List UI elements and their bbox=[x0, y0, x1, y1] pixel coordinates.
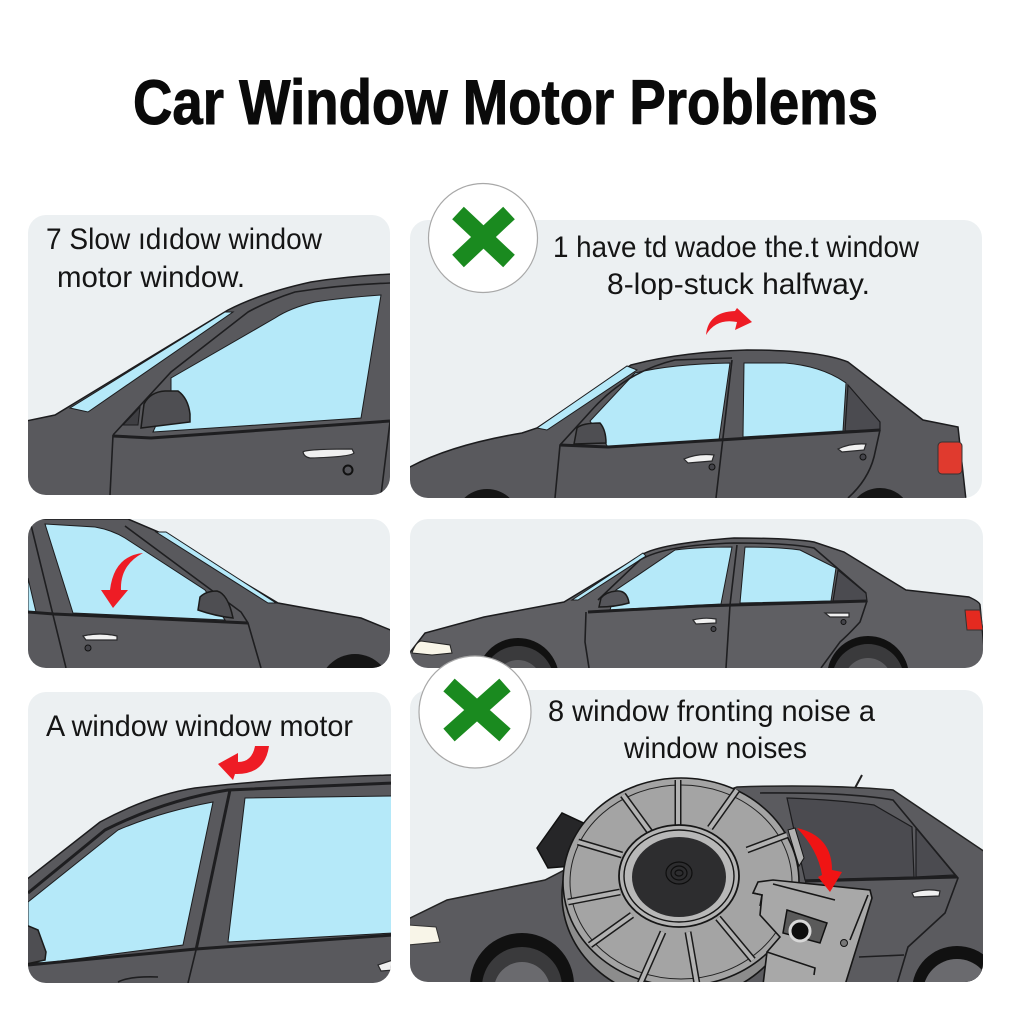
rear handle bbox=[825, 613, 849, 617]
wing mirror bbox=[599, 591, 629, 607]
caption line 2: 8-lop-stuck halfway. bbox=[607, 268, 870, 301]
belt line bbox=[560, 430, 880, 447]
door handle bbox=[303, 449, 354, 458]
red arrow bbox=[797, 828, 842, 892]
headlight bbox=[408, 925, 440, 945]
windshield bbox=[70, 312, 233, 412]
rim tab bbox=[788, 828, 804, 866]
spoke outlines bbox=[568, 780, 787, 984]
windshield bbox=[537, 366, 637, 430]
windshield strip bbox=[156, 532, 276, 603]
mirror triangle bbox=[123, 407, 140, 425]
quarter window bbox=[916, 828, 955, 877]
red arrow bbox=[218, 746, 269, 780]
windshield bbox=[572, 553, 646, 600]
rear window bbox=[787, 798, 914, 880]
lower door line bbox=[118, 950, 196, 983]
door handle bbox=[378, 960, 393, 971]
wing mirror bbox=[574, 423, 606, 444]
plate bracket bbox=[753, 884, 868, 975]
hub centre bbox=[666, 862, 692, 884]
panel: slow window motor bbox=[26, 215, 392, 497]
door window bbox=[45, 524, 225, 620]
lens bbox=[790, 921, 810, 941]
wing mirror bbox=[141, 391, 190, 428]
icon: green cross badge top bbox=[428, 184, 538, 292]
wing mirror bbox=[198, 591, 233, 618]
panel: window noises bbox=[408, 690, 1002, 1024]
belt line bbox=[113, 421, 390, 438]
front window bbox=[28, 802, 213, 963]
caption line 2: window noises bbox=[623, 732, 807, 765]
rear door handle bbox=[912, 890, 940, 897]
car body bbox=[26, 519, 393, 670]
wing mirror bbox=[26, 925, 46, 964]
plate screw bbox=[840, 940, 848, 946]
inner rim bbox=[570, 785, 792, 979]
rear wheel bbox=[912, 946, 1002, 1024]
wheel bbox=[319, 654, 391, 726]
car body bbox=[408, 538, 986, 670]
motor drum bbox=[562, 778, 804, 1000]
car body bbox=[26, 274, 392, 497]
panel: window stuck halfway bbox=[410, 220, 982, 498]
quarter window bbox=[833, 570, 867, 601]
panel: window motor bbox=[26, 692, 393, 985]
spoke faces bbox=[568, 780, 787, 984]
rear wheel bbox=[857, 488, 903, 498]
small rear window bbox=[28, 578, 36, 612]
car body bbox=[408, 786, 985, 984]
front wheel bbox=[464, 489, 510, 498]
door lines bbox=[31, 525, 261, 668]
red arrow bbox=[706, 308, 752, 335]
antenna bbox=[855, 775, 862, 788]
front wheel bbox=[477, 638, 559, 720]
front handle bbox=[693, 618, 716, 624]
caption: 1 have td wadoe the.t window bbox=[553, 231, 919, 264]
front handle bbox=[684, 454, 714, 463]
red arrow bbox=[101, 553, 143, 608]
lens housing bbox=[783, 910, 827, 943]
panel: sedan side view bbox=[408, 519, 986, 720]
door lock bbox=[344, 466, 352, 474]
door locks bbox=[711, 620, 846, 632]
door lines bbox=[585, 543, 867, 668]
gear plate bbox=[753, 880, 872, 985]
side window bbox=[153, 295, 381, 432]
tail light bbox=[965, 610, 983, 630]
caption: 8 window fronting noise a bbox=[548, 695, 875, 728]
headlight bbox=[412, 641, 452, 655]
door frame lines bbox=[110, 283, 390, 495]
tail light bbox=[938, 442, 962, 474]
door lock bbox=[85, 645, 91, 651]
door locks bbox=[709, 454, 866, 470]
belt line bbox=[28, 612, 248, 623]
caption: 7 Slow ıdıdow window bbox=[46, 223, 322, 256]
rear window bbox=[743, 363, 846, 437]
quarter window bbox=[845, 385, 880, 431]
door lines bbox=[555, 358, 880, 498]
motor hub bbox=[632, 837, 726, 917]
icon: green cross badge bottom bbox=[419, 656, 531, 768]
caption line 2: motor window. bbox=[57, 261, 245, 294]
motor inner ring bbox=[624, 830, 734, 922]
front window bbox=[590, 363, 730, 447]
caption: A window window motor bbox=[46, 710, 353, 743]
door lines bbox=[28, 783, 393, 965]
rear window bbox=[740, 547, 836, 603]
rear wheel bbox=[827, 636, 909, 718]
door handle bbox=[83, 634, 117, 640]
belt line bbox=[805, 877, 957, 881]
front window bbox=[610, 547, 732, 610]
belt line bbox=[588, 601, 867, 612]
motor ring bbox=[619, 825, 739, 927]
panel: window lowering bbox=[28, 519, 390, 668]
rear window bbox=[228, 796, 393, 942]
front wheel bbox=[470, 933, 574, 1024]
door lines bbox=[760, 793, 958, 984]
car body bbox=[26, 775, 393, 985]
black connector bbox=[537, 813, 590, 868]
car body bbox=[408, 350, 966, 500]
title: Car Window Motor Problems bbox=[133, 68, 878, 138]
rear handle bbox=[838, 444, 866, 452]
